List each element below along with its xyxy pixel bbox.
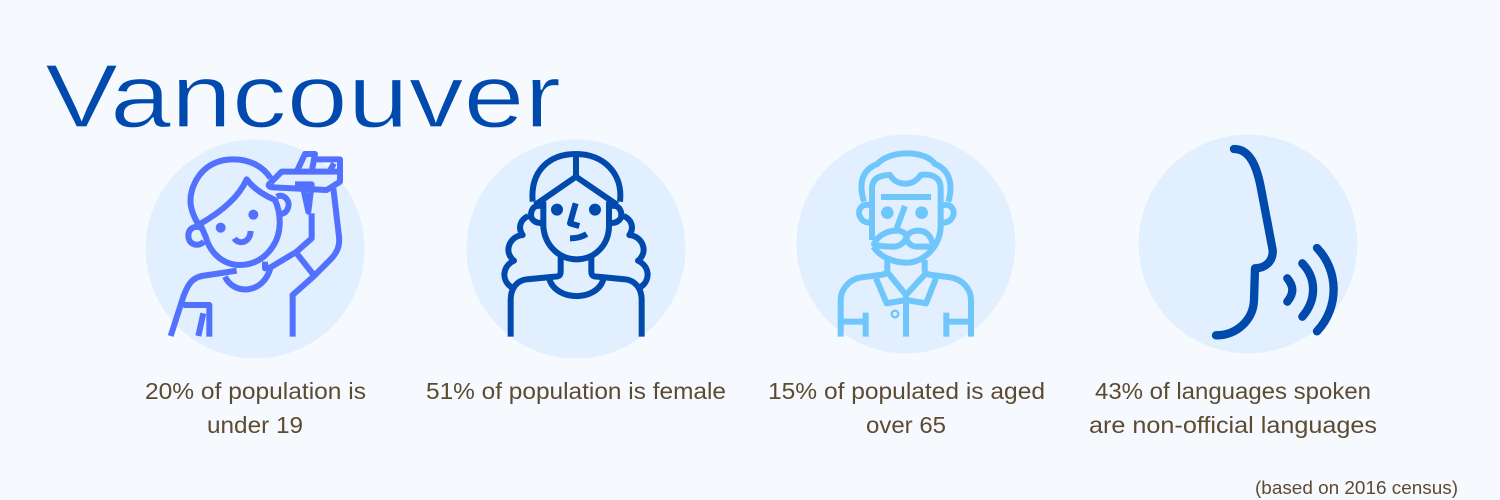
stat text: seniors: over 65	[866, 412, 946, 438]
stat text: seniors: 15% of populated is aged	[768, 378, 1045, 404]
icon: older man with moustache	[841, 153, 971, 337]
icon: child with paper plane	[171, 154, 340, 337]
title: Vancouver	[45, 47, 561, 147]
panel: languages	[1089, 134, 1377, 438]
source note: (based on 2016 census)	[1255, 478, 1458, 498]
stat text: female: 51% of population is female	[426, 378, 726, 404]
icon background circle: languages	[1138, 134, 1358, 354]
icon: face profile speaking	[1216, 149, 1334, 335]
stat text: youth	[145, 378, 366, 438]
stat text: youth: under 19	[207, 412, 303, 438]
stat text: youth: 20% of population is	[145, 378, 366, 404]
stat text: languages: are non-official languages	[1089, 412, 1377, 438]
icon background circle: youth	[146, 140, 364, 358]
stat text: languages: 43% of languages spoken	[1095, 378, 1371, 404]
panel: female	[426, 140, 726, 404]
icon background circle: female	[466, 140, 686, 358]
icon: woman with curly hair	[504, 154, 648, 337]
icon background circle: seniors	[796, 134, 1016, 354]
panel: seniors	[768, 134, 1045, 438]
panel: youth	[145, 140, 366, 438]
stat text: languages	[1089, 378, 1377, 438]
stat text: seniors	[768, 378, 1045, 438]
